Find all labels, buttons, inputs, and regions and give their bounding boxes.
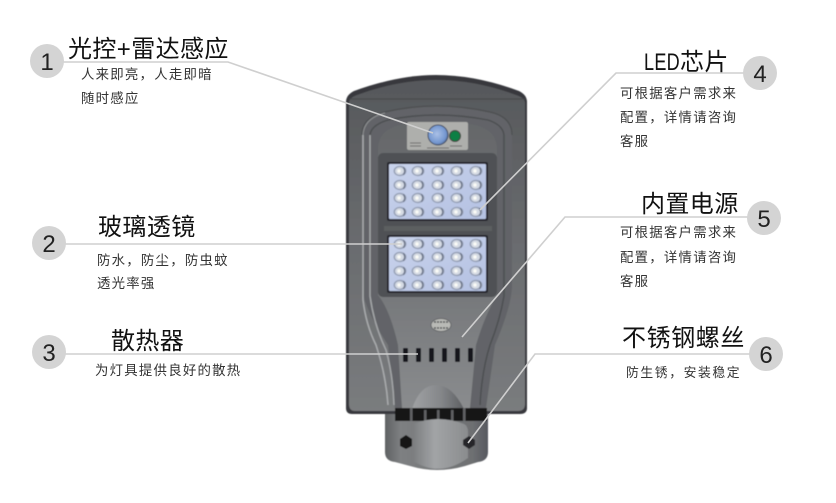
LED frame <box>378 153 497 297</box>
callout 2 <box>32 214 229 291</box>
body text: 防水，防尘，防虫蚊 <box>97 253 229 268</box>
callout 5 <box>620 191 781 289</box>
raised centre shield <box>362 106 512 408</box>
front block <box>413 419 468 469</box>
heading: 玻璃透镜 <box>98 214 196 241</box>
LED panel lower <box>387 235 488 293</box>
lamp main face <box>349 80 525 411</box>
LED panel upper <box>387 162 488 221</box>
callout 1: 1 <box>40 49 54 76</box>
heading: 散热器 <box>111 328 184 355</box>
heading: LED <box>644 49 680 76</box>
sensor plate <box>407 122 468 150</box>
callout 2: 2 <box>42 231 56 258</box>
heading: 芯片 <box>680 49 729 76</box>
dome <box>412 385 464 409</box>
body text <box>81 66 213 106</box>
icon: radar sensor <box>428 125 448 145</box>
centre taper panel <box>378 122 497 408</box>
callout 6: 6 <box>759 342 773 369</box>
bolt hole left <box>400 435 412 449</box>
body text: 透光率强 <box>97 275 156 291</box>
body text: 人来即亮，人走即暗 <box>81 66 213 82</box>
callout 3: 3 <box>42 340 56 367</box>
body text: 可根据客户需求来 <box>620 85 737 101</box>
shield ridges <box>362 106 512 405</box>
body text: 可根据客户需求来 <box>620 224 737 240</box>
body text <box>97 253 229 291</box>
heading: 不锈钢螺丝 <box>622 325 745 352</box>
body text: 配置，详情请咨询 <box>620 110 737 125</box>
callout 4: 4 <box>753 61 767 88</box>
icon: green indicator <box>450 130 460 142</box>
body text: 防生锈，安装稳定 <box>626 365 741 380</box>
lamp back housing <box>346 75 527 414</box>
callout 6 <box>622 325 783 380</box>
slotted band <box>395 408 487 422</box>
leader lines <box>62 62 750 443</box>
logo badge <box>431 318 451 332</box>
callout 4 <box>620 49 777 149</box>
callout 3 <box>32 328 241 378</box>
body text: 客服 <box>620 273 649 289</box>
body text <box>620 224 737 289</box>
heading <box>644 49 729 76</box>
mounting bracket <box>385 385 488 470</box>
callout 1 <box>30 36 229 106</box>
body text: 随时感应 <box>81 90 140 106</box>
heat vents <box>403 348 473 362</box>
callout 5: 5 <box>757 206 771 233</box>
street lamp <box>346 75 527 470</box>
heading: 光控+雷达感应 <box>68 36 229 63</box>
bolt hole right <box>463 436 475 449</box>
body text: 为灯具提供良好的散热 <box>95 363 241 378</box>
body text <box>620 85 737 149</box>
heading: 内置电源 <box>641 191 739 218</box>
body text: 客服 <box>620 133 649 149</box>
body text: 配置，详情请咨询 <box>620 250 737 265</box>
